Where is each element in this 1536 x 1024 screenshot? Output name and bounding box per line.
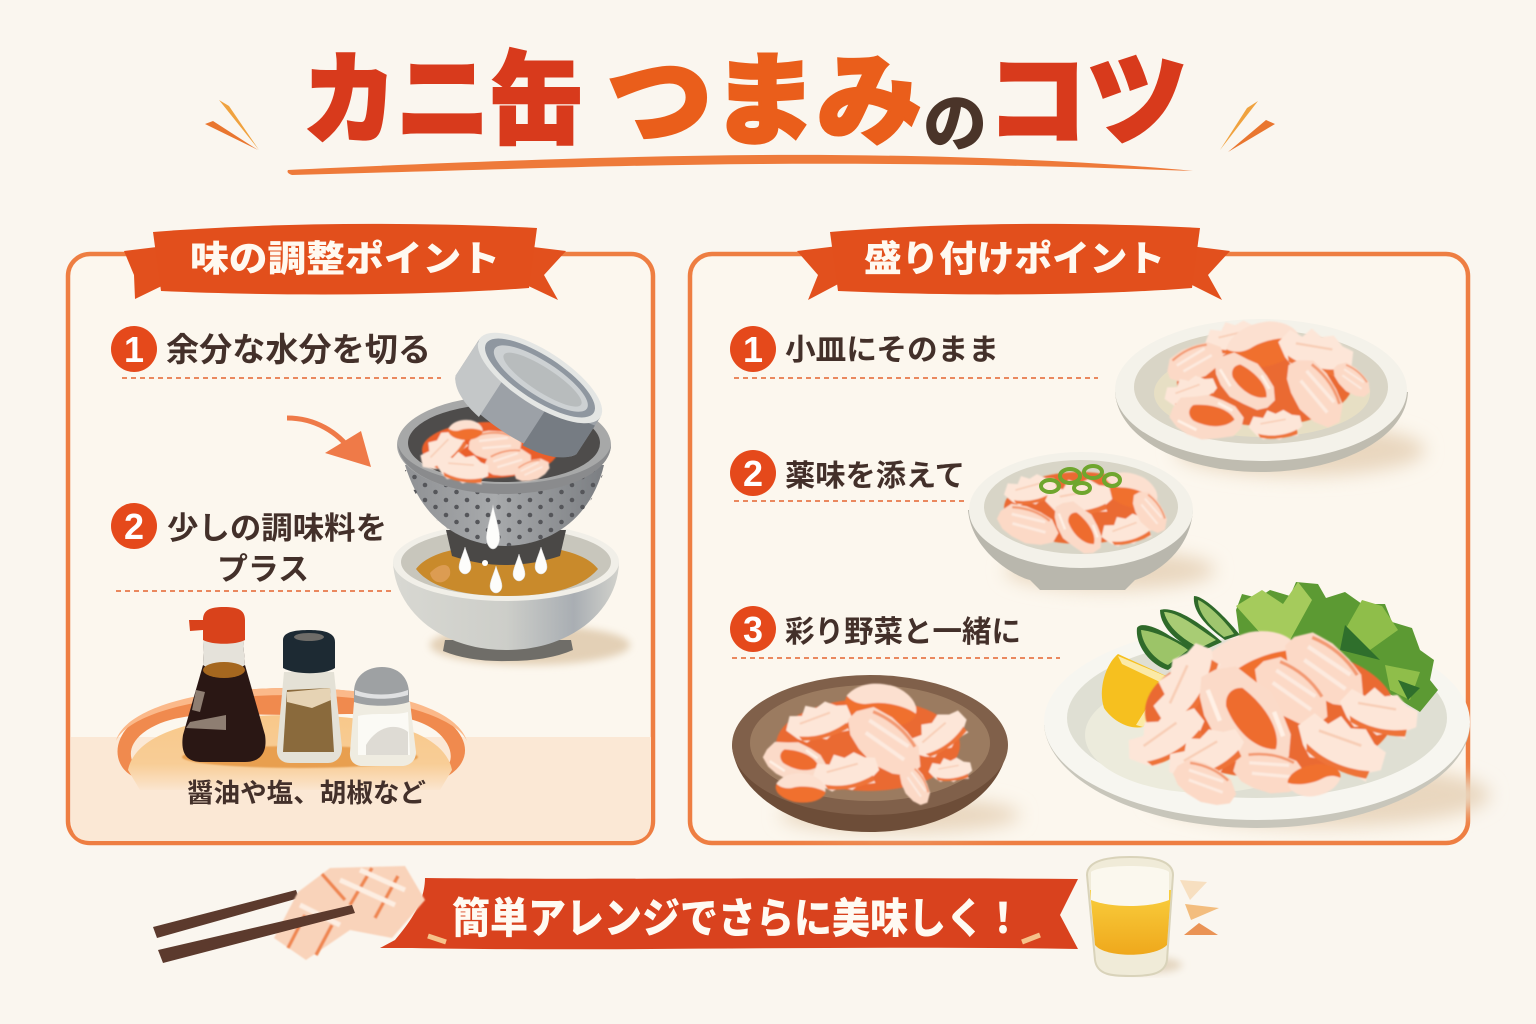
banner text: 簡単アレンジでさらに美味しく！ [452, 895, 1022, 942]
colander [397, 396, 611, 565]
ribbon heading [124, 224, 566, 300]
title text: no: の [923, 88, 987, 160]
lower bowl [393, 523, 619, 661]
title text: kotsu: コツ [987, 46, 1187, 158]
step 1: 1 [124, 329, 144, 370]
panel: taste adjustment [68, 224, 653, 843]
step 3: 3 [743, 609, 763, 650]
right sparkle [1220, 101, 1275, 152]
soy sauce bottle [182, 607, 266, 762]
chopsticks holding crab [153, 866, 425, 963]
can [444, 316, 615, 473]
step 1: 余分な水分を切る [166, 331, 431, 368]
chopstick front [158, 905, 355, 963]
crab pile [1117, 617, 1423, 814]
step 2: 薬味を添えて [785, 460, 965, 493]
ribbon title text: 盛り付けポイント [864, 238, 1165, 279]
crab pile [1161, 315, 1376, 445]
bottom banner [380, 878, 1078, 949]
step 3: 彩り野菜と一緒に [785, 616, 1021, 649]
arrow [287, 418, 371, 467]
crab piece [274, 866, 425, 960]
title underline swoosh [288, 155, 1193, 175]
drips [459, 506, 547, 593]
beer glass [1087, 857, 1219, 976]
small plate with crab [1115, 315, 1425, 476]
black cap [283, 630, 335, 673]
scallions [1041, 466, 1120, 493]
cucumbers [1137, 596, 1240, 670]
large plate with crab and vegetables [1044, 582, 1490, 828]
step 2 [111, 503, 392, 591]
seasoning tray [116, 688, 467, 790]
red cap [189, 607, 245, 644]
step 2: プラス [217, 552, 309, 587]
step 1: 1 [743, 329, 763, 370]
title text: tsumami: つまみ [607, 46, 922, 158]
peach floor band [71, 737, 651, 841]
step 1 [111, 326, 441, 378]
crab pile [759, 678, 975, 810]
wooden plate with crab [732, 675, 1020, 833]
title text: kani can: カニ缶 [303, 45, 583, 157]
step 2 [730, 450, 965, 501]
bowl shadow [430, 625, 630, 665]
step 1 [730, 326, 1098, 378]
pepper shaker [277, 630, 342, 763]
ribbon heading [797, 224, 1230, 300]
sauce [416, 545, 598, 596]
step 2: 少しの調味料を [167, 511, 387, 546]
panel background [68, 254, 653, 843]
chopsticks back [153, 890, 299, 938]
bowl with crab and scallions [968, 452, 1215, 590]
crab in colander [413, 420, 558, 488]
accent triangles [1180, 880, 1219, 935]
lettuce [1236, 582, 1438, 712]
lemon [1102, 654, 1175, 728]
seasoning caption: 醤油や塩、胡椒など [187, 778, 426, 808]
title [303, 45, 1187, 160]
step 1: 小皿にそのまま [785, 334, 999, 367]
banner accent marks [428, 935, 1040, 942]
panel background [690, 254, 1468, 843]
left sparkle [205, 100, 259, 150]
drain bowl illustration [393, 316, 630, 665]
step 2: 2 [124, 506, 144, 547]
ribbon title text: 味の調整ポイント [190, 238, 500, 279]
crab pile [992, 465, 1174, 562]
salt shaker [350, 667, 416, 766]
metal cap [354, 667, 409, 706]
panel: plating [690, 224, 1490, 843]
step 2: 2 [743, 453, 763, 494]
step 3 [730, 606, 1060, 658]
